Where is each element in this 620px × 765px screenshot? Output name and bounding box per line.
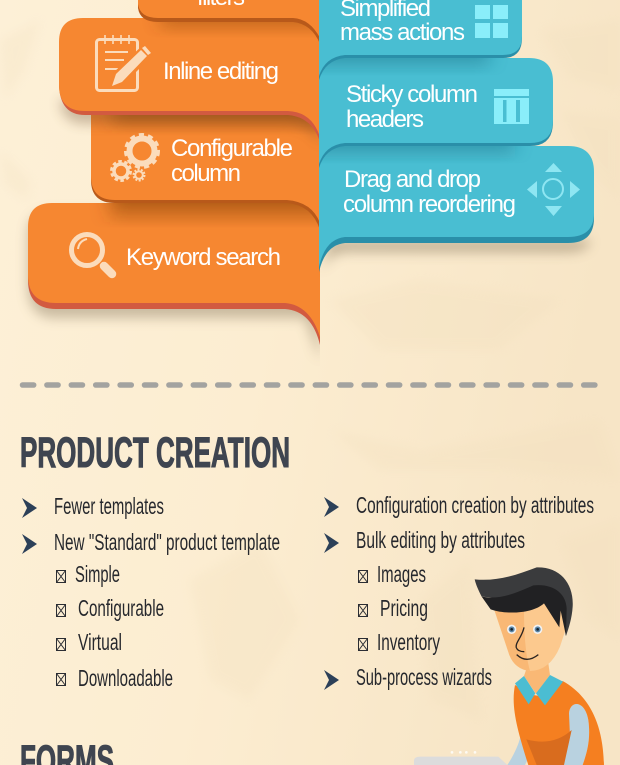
panel: orange feature banners [28, 0, 340, 360]
bullet: sub-process wizards: Sub-process wizards [356, 664, 492, 690]
icon: magnifier [72, 234, 112, 274]
shadow on keyword banner [100, 203, 318, 225]
banner: configurable column: column [171, 160, 241, 187]
banner: sticky column headers [319, 58, 553, 168]
shadow on inline banner [154, 22, 314, 34]
sub-item: simple: Simple [75, 561, 120, 587]
panel: blue feature banners [319, 0, 594, 272]
banner: inline editing [59, 18, 340, 145]
bullet: bulk editing by attributes [324, 527, 525, 553]
hair [475, 567, 573, 636]
banner: filters [138, 0, 320, 44]
sub-item: simple [56, 561, 120, 587]
banner: drag and drop column reordering [319, 146, 594, 272]
label: sticky column headers: Sticky column [346, 81, 478, 108]
sub-item: configurable: Configurable [78, 595, 164, 621]
sub-item: virtual: Virtual [78, 629, 122, 655]
bullet: new standard product template: New "Standard" product template [54, 529, 280, 555]
neck [524, 663, 550, 694]
sub-item: images [358, 561, 426, 587]
icon: notepad and pencil [96, 35, 153, 90]
sub-item: downloadable [56, 665, 173, 691]
sub-item: inventory: Inventory [377, 629, 440, 655]
bullet: new standard product template [22, 529, 280, 555]
banner: keyword search [28, 203, 340, 360]
label: configurable column: Configurable [171, 135, 293, 162]
shadow on sticky banner [324, 58, 495, 71]
banner: simplified mass actions: mass actions [340, 19, 465, 46]
icon: gears [112, 135, 158, 180]
sub-item: pricing: Pricing [380, 595, 428, 621]
shadow on drag banner [324, 146, 520, 159]
list: right column [324, 492, 594, 690]
sub-item: images: Images [377, 561, 426, 587]
sub-item: virtual [56, 629, 122, 655]
icon: move arrows [527, 163, 580, 216]
sub-item: configurable [56, 595, 164, 621]
sweater [514, 681, 604, 765]
face [494, 593, 566, 671]
laptop [414, 751, 507, 765]
heading: product creation: PRODUCT CREATION [20, 429, 290, 477]
icon: table columns [494, 89, 529, 124]
shadow on configurable banner [106, 115, 314, 132]
collar [515, 675, 563, 705]
illustration: man at laptop [414, 567, 604, 765]
bullet: fewer templates [22, 493, 164, 519]
bullet: sub-process wizards [324, 664, 492, 690]
nose and mouth [516, 627, 538, 659]
sleeves [507, 704, 589, 765]
bullet: bulk editing by attributes: Bulk editing by attributes [356, 527, 525, 553]
bullet: fewer templates: Fewer templates [54, 493, 164, 519]
label: inline editing: Inline editing [163, 58, 279, 85]
eyes [507, 625, 542, 634]
banner: sticky column headers: headers [346, 106, 424, 133]
sweater shadow [526, 730, 572, 765]
banner: simplified mass actions [319, 0, 522, 80]
sub-item: pricing [358, 595, 428, 621]
sub-item: inventory [358, 629, 440, 655]
icon: four squares [475, 5, 508, 38]
list: left column [22, 493, 280, 691]
dashed divider [22, 382, 598, 388]
label: keyword search: Keyword search [126, 244, 281, 271]
sub-item: downloadable: Downloadable [78, 665, 173, 691]
banner: drag and drop column reordering: column reordering [343, 191, 516, 218]
label: drag and drop column reordering: Drag and drop [344, 166, 481, 193]
banner: configurable column [91, 115, 319, 227]
